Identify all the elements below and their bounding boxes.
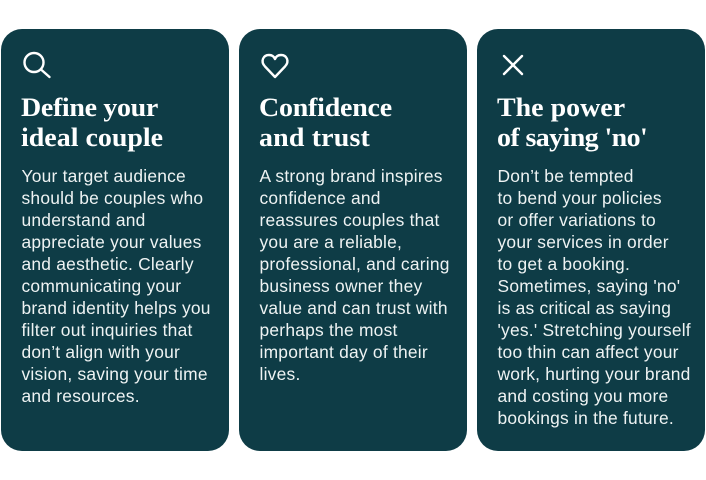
- heading: The power: [497, 93, 625, 122]
- body text: 'yes.' Stretching yourself: [498, 320, 691, 340]
- body text: to bend your policies: [498, 188, 662, 208]
- panel: the power of saying no: [477, 29, 705, 451]
- body text: [260, 166, 450, 384]
- body text: or offer variations to: [498, 210, 656, 230]
- body text: your services in order: [498, 232, 669, 252]
- body text: and aesthetic. Clearly: [22, 254, 194, 274]
- body text: bookings in the future.: [498, 408, 674, 428]
- body text: [498, 166, 691, 428]
- body text: work, hurting your brand: [498, 364, 691, 384]
- body text: and costing you more: [498, 386, 668, 406]
- body text: lives.: [260, 364, 301, 384]
- heading: ideal couple: [21, 123, 163, 152]
- heading: Confidence: [259, 93, 392, 122]
- heading: [259, 93, 392, 152]
- heading: Define your: [21, 93, 158, 122]
- body text: Your target audience: [22, 166, 186, 186]
- body text: professional, and caring: [260, 254, 450, 274]
- body text: Don’t be tempted: [498, 166, 634, 186]
- panel: define your ideal couple: [1, 29, 229, 451]
- body text: confidence and: [260, 188, 381, 208]
- body text: value and can trust with: [260, 298, 448, 318]
- body text: understand and: [22, 210, 146, 230]
- body text: vision, saving your time: [22, 364, 208, 384]
- heading: of saying 'no': [497, 123, 647, 152]
- body text: to get a booking.: [498, 254, 630, 274]
- body text: business owner they: [260, 276, 422, 296]
- body text: Sometimes, saying 'no': [498, 276, 680, 296]
- heading: [497, 93, 647, 152]
- body text: is as critical as saying: [498, 298, 671, 318]
- body text: don’t align with your: [22, 342, 180, 362]
- body text: reassures couples that: [260, 210, 440, 230]
- body text: too thin can affect your: [498, 342, 679, 362]
- body text: appreciate your values: [22, 232, 202, 252]
- body text: A strong brand inspires: [260, 166, 443, 186]
- body text: communicating your: [22, 276, 181, 296]
- body text: you are a reliable,: [260, 232, 402, 252]
- body text: perhaps the most: [260, 320, 398, 340]
- body text: should be couples who: [22, 188, 203, 208]
- heading: and trust: [259, 123, 370, 152]
- body text: brand identity helps you: [22, 298, 211, 318]
- heading: [21, 93, 163, 152]
- body text: important day of their: [260, 342, 428, 362]
- panel: confidence and trust: [239, 29, 467, 451]
- body text: and resources.: [22, 386, 140, 406]
- icon: heart: [261, 54, 289, 78]
- body text: [22, 166, 211, 406]
- body text: filter out inquiries that: [22, 320, 193, 340]
- icon: magnifying glass: [23, 52, 51, 78]
- icon: cross: [502, 54, 524, 76]
